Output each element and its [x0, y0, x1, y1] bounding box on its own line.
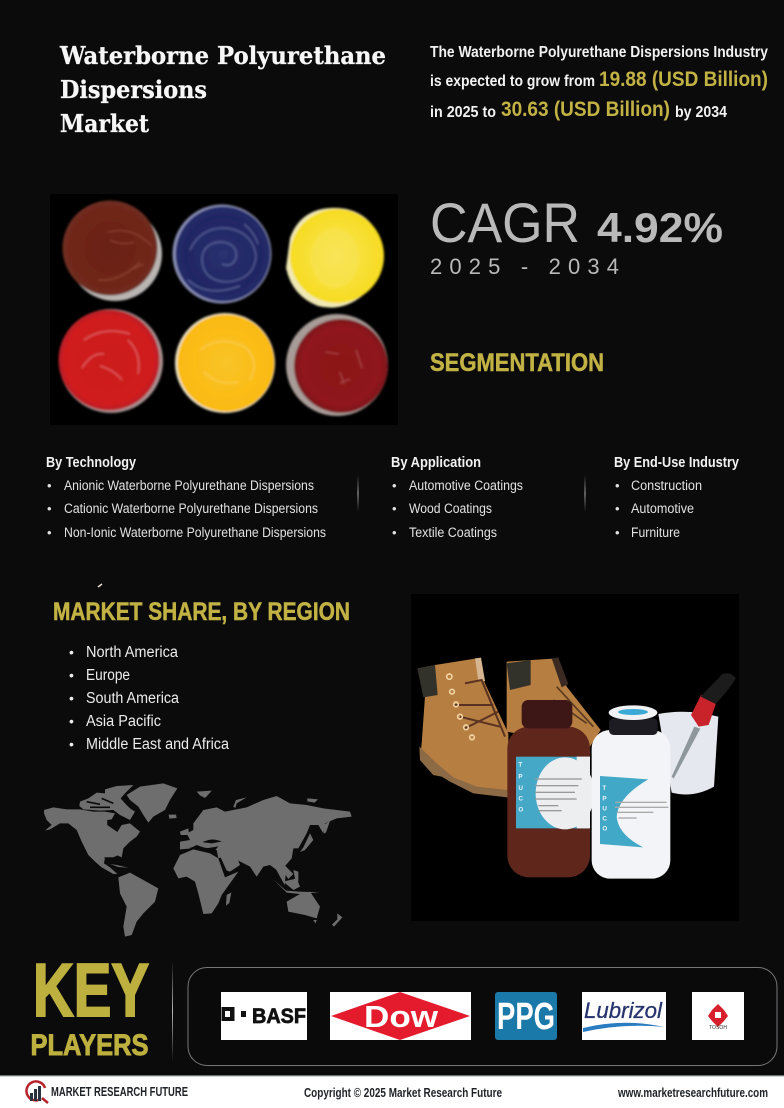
- key players panel: [188, 968, 777, 1066]
- market size summary: by 2034: [675, 104, 727, 121]
- segment: by end-use industry: •: [615, 478, 620, 493]
- region list: •: [69, 690, 74, 706]
- segment: by end-use industry: •: [615, 501, 620, 516]
- logo: BASF: [221, 992, 307, 1040]
- segment: by technology: •: [47, 501, 52, 516]
- segment: by end-use industry: By End-Use Industry: [614, 454, 740, 471]
- segment: by end-use industry: [614, 454, 740, 540]
- bottle: brown: U: [518, 785, 523, 792]
- logo: BASF: BASF: [252, 1005, 306, 1028]
- region list: North America: [86, 644, 178, 661]
- key players heading: KEY: [33, 948, 149, 1032]
- logo: Tosoh: [692, 992, 744, 1040]
- jar: red: [58, 309, 163, 413]
- region list: [69, 644, 229, 753]
- title: Waterborne Polyurethane: [59, 41, 386, 70]
- footer: [0, 1076, 784, 1108]
- cup with dropper: [658, 673, 736, 795]
- segmentation heading: SEGMENTATION: [430, 349, 604, 377]
- segment: by technology: •: [47, 478, 52, 493]
- market size summary: in 2025 to: [430, 104, 496, 121]
- region list: •: [69, 644, 74, 660]
- market size summary: [430, 44, 768, 121]
- logo: PPG: PPG: [497, 996, 555, 1038]
- jar: blue: [172, 204, 272, 304]
- market share heading: MARKET SHARE, BY REGION: [53, 598, 350, 626]
- boot: rear: [507, 657, 601, 747]
- jar: orange: [175, 313, 275, 413]
- boot: front: [417, 658, 508, 797]
- region list: •: [69, 736, 74, 752]
- segment: by application: Wood Coatings: [409, 501, 492, 516]
- bottle: white: O: [602, 826, 607, 833]
- segment: by application: By Application: [391, 454, 481, 471]
- bottle: white: C: [602, 816, 607, 823]
- region list: •: [69, 713, 74, 729]
- segment: by application: •: [392, 501, 397, 516]
- world map: [44, 783, 352, 937]
- region list: South America: [86, 690, 179, 707]
- region list: •: [69, 667, 74, 683]
- jar: dark red: [286, 314, 388, 416]
- logo: Lubrizol: [582, 992, 666, 1040]
- segment: by technology: Non-Ionic Waterborne Polyurethane Dispersions: [64, 525, 326, 540]
- market size summary: is expected to grow from: [430, 73, 595, 90]
- segment: by application: Automotive Coatings: [409, 478, 523, 493]
- CAGR figure: CAGR: [430, 191, 580, 254]
- segment: by end-use industry: Furniture: [631, 525, 680, 540]
- CAGR figure: 4.92%: [597, 204, 723, 251]
- segment: by end-use industry: Construction: [631, 478, 702, 493]
- title: Market: [60, 109, 149, 138]
- region list: Middle East and Africa: [86, 736, 229, 753]
- segment: by application: [391, 454, 523, 540]
- logo: Dow: Dow: [364, 999, 439, 1034]
- logo: Tosoh: TOSOH: [709, 1025, 727, 1031]
- bottle: white: [592, 705, 670, 879]
- segment: by technology: By Technology: [46, 454, 137, 471]
- segment: by end-use industry: Automotive: [631, 501, 694, 516]
- segment: by technology: Cationic Waterborne Polyurethane Dispersions: [64, 501, 318, 516]
- segment: by technology: •: [47, 525, 52, 540]
- segment: by end-use industry: •: [615, 525, 620, 540]
- region list: Asia Pacific: [86, 713, 161, 730]
- bottle: brown: O: [518, 807, 523, 814]
- region list: Europe: [86, 667, 130, 684]
- title: Dispersions: [60, 75, 207, 104]
- title: [59, 41, 386, 138]
- key players heading: PLAYERS: [30, 1029, 148, 1062]
- jar: brown: [62, 200, 162, 301]
- copyright: Copyright © 2025 Market Research Future: [304, 1086, 502, 1100]
- bottle: white: T: [602, 785, 606, 792]
- logo: Dow: [330, 992, 471, 1040]
- CAGR figure: 2025 - 2034: [430, 254, 619, 279]
- footer brand: MARKET RESEARCH FUTURE: [51, 1085, 188, 1099]
- key players heading: [30, 948, 149, 1062]
- segment: by application: Textile Coatings: [409, 525, 497, 540]
- logo: Lubrizol: Lubrizol: [584, 998, 663, 1023]
- bottle: white: U: [602, 806, 607, 813]
- bottle: brown: C: [518, 796, 523, 803]
- bottle: brown: [507, 700, 594, 877]
- CAGR figure: [430, 191, 723, 279]
- segment: by application: •: [392, 478, 397, 493]
- segment: by technology: [46, 454, 326, 540]
- segment: by application: •: [392, 525, 397, 540]
- logo: PPG: [495, 992, 557, 1040]
- segment: by technology: Anionic Waterborne Polyurethane Dispersions: [64, 478, 314, 493]
- market size summary: 19.88 (USD Billion): [599, 68, 768, 91]
- image: paint jars: [50, 194, 398, 425]
- jar: yellow: [286, 208, 384, 308]
- bottle: brown: T: [518, 762, 522, 769]
- footer logo: [26, 1081, 48, 1103]
- image: boots and bottles: [411, 594, 739, 921]
- bottle: white: P: [602, 796, 607, 803]
- bottle: brown: P: [518, 773, 523, 780]
- market size summary: 30.63 (USD Billion): [501, 98, 670, 121]
